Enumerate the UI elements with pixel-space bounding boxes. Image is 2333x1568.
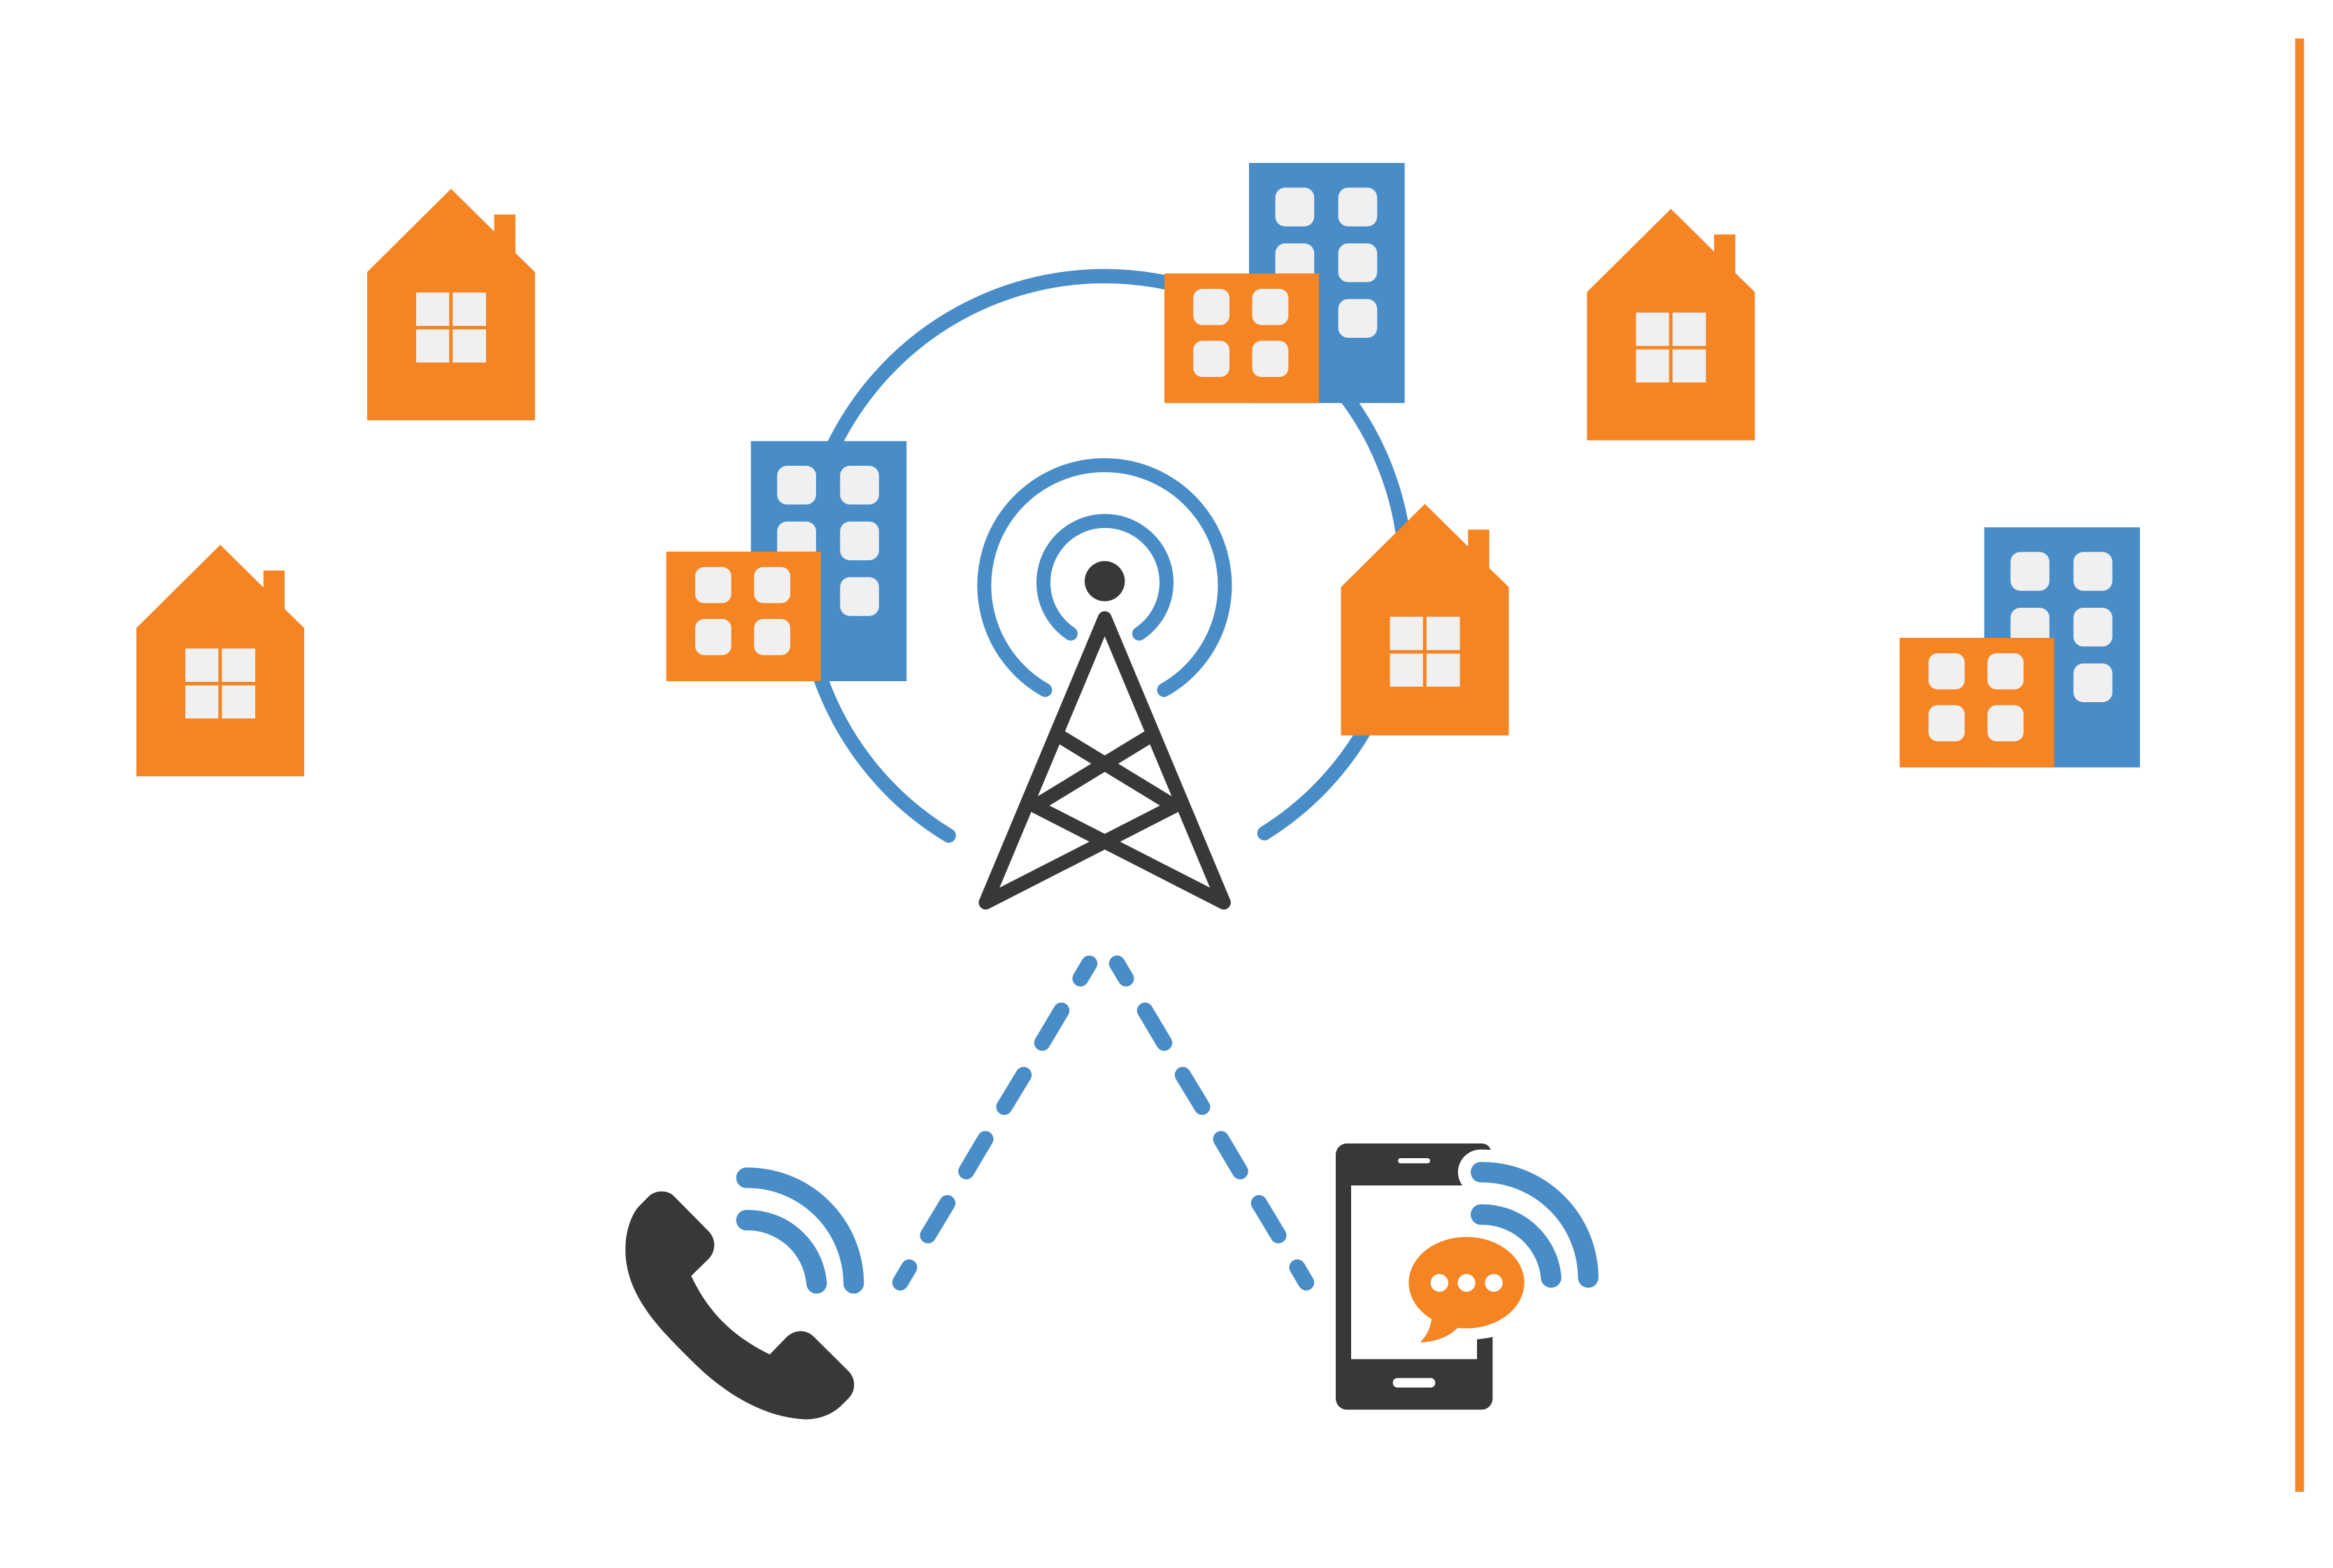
house: upper right <box>1587 209 1755 441</box>
house: upper left <box>367 189 535 420</box>
tower lattice <box>986 618 1224 902</box>
building: top on circle <box>1164 163 1405 403</box>
house: on circle right <box>1341 504 1509 736</box>
tower signal arcs <box>984 465 1225 690</box>
handset signal arcs <box>746 1178 854 1283</box>
building: left on circle <box>666 441 906 681</box>
coverage circle arc <box>804 276 1406 836</box>
smartphone home button <box>1393 1378 1435 1388</box>
right orange vertical bar <box>2295 38 2304 1492</box>
icon: radio tower <box>984 465 1225 902</box>
smartphone speaker <box>1398 1158 1430 1163</box>
building: far right <box>1899 527 2140 767</box>
signal link: right dashed line <box>1117 964 1306 1283</box>
smartphone body <box>1336 1143 1492 1410</box>
icon: smartphone with chat bubble and signal <box>1336 1143 1588 1410</box>
smartphone signal arcs <box>1481 1172 1588 1278</box>
signal link: left dashed line <box>900 964 1090 1283</box>
handset <box>625 1191 854 1419</box>
tower antenna dot <box>1085 561 1125 601</box>
icon: telephone handset with signal <box>625 1178 854 1419</box>
house: far left <box>136 545 304 776</box>
chat bubble <box>1408 1237 1525 1342</box>
